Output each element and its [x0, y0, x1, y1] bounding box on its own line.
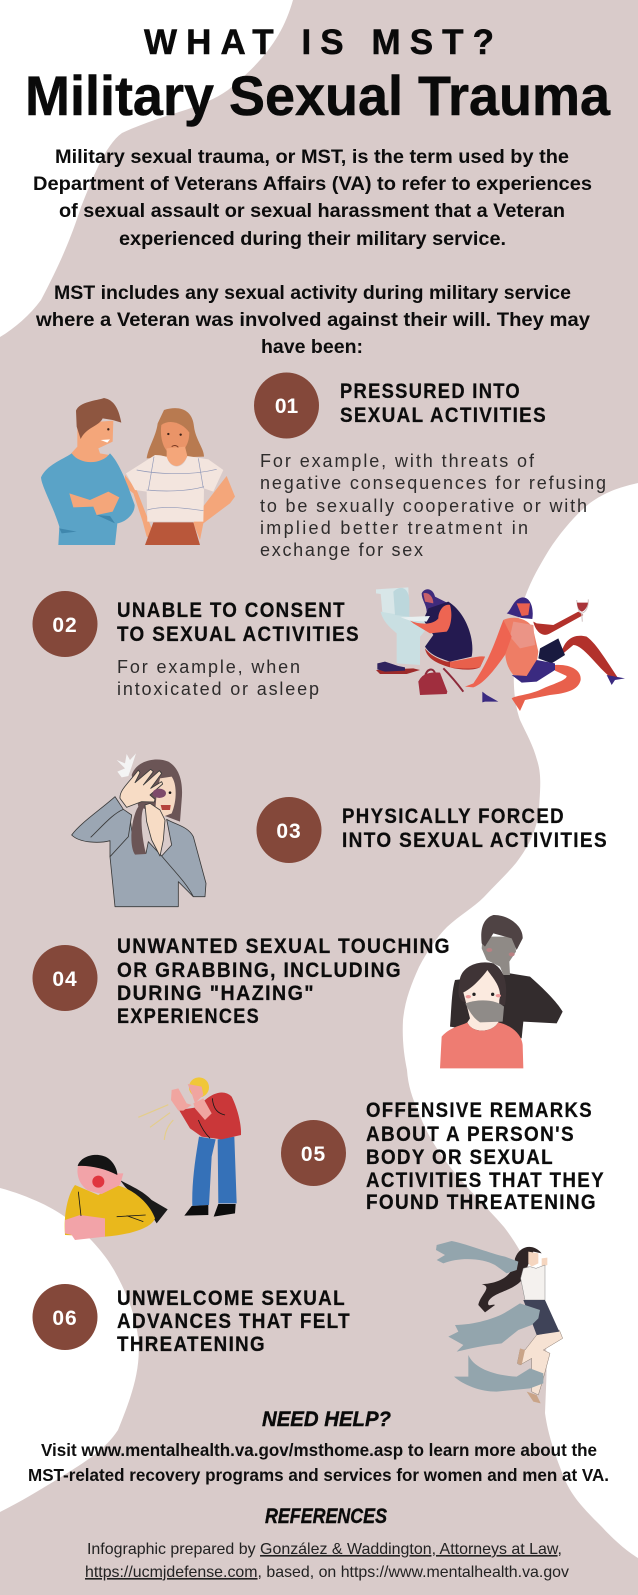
second paragraph: have been:: [261, 336, 363, 358]
text block: help: [28, 1440, 609, 1485]
description 01: negative consequences for refusing: [260, 473, 606, 493]
heading 03: INTO SEXUAL ACTIVITIES: [342, 829, 608, 852]
heading 01: PRESSURED INTO: [340, 380, 521, 403]
heading 06: [117, 1287, 351, 1356]
intro paragraph: of sexual assault or sexual harassment that a Veteran: [59, 200, 565, 222]
intro paragraph: [33, 146, 592, 250]
heading 06: UNWELCOME SEXUAL: [117, 1287, 346, 1310]
description 02: [117, 657, 319, 699]
badge 05: [281, 1120, 346, 1186]
heading 05: ABOUT A PERSON'S: [366, 1123, 575, 1146]
heading: references: REFERENCES: [265, 1505, 387, 1528]
text block: references: https://ucmjdefense.com, based, on https://www.mentalhealth.va.gov: [85, 1564, 569, 1581]
second paragraph: [35, 282, 590, 358]
heading 02: TO SEXUAL ACTIVITIES: [117, 623, 360, 646]
panel: item 02: [32, 591, 360, 699]
heading 04: UNWANTED SEXUAL TOUCHING: [117, 935, 451, 958]
heading 04: OR GRABBING, INCLUDING: [117, 959, 402, 982]
heading 05: OFFENSIVE REMARKS: [366, 1099, 593, 1122]
heading 04: [117, 935, 451, 1028]
heading 06: ADVANCES THAT FELT: [117, 1310, 351, 1333]
heading 05: BODY OR SEXUAL: [366, 1146, 554, 1169]
description 01: to be sexually cooperative or with: [260, 496, 587, 516]
text block: references: Infographic prepared by González & Waddington, Attorneys at Law,: [87, 1541, 562, 1558]
panel: item 06: [32, 1284, 351, 1356]
badge 04: [32, 945, 98, 1011]
description 02: intoxicated or asleep: [117, 679, 319, 699]
badge 04: 04: [52, 968, 78, 991]
heading 06: THREATENING: [117, 1333, 266, 1356]
heading 05: [366, 1099, 605, 1214]
icon: man shouting at woman: [65, 1077, 241, 1240]
panel: item 04: [32, 935, 451, 1028]
text block: references: [85, 1541, 569, 1581]
description 02: For example, when: [117, 657, 300, 677]
heading 03: PHYSICALLY FORCED: [342, 805, 565, 828]
badge 05: 05: [301, 1143, 326, 1166]
icon: man covering woman's mouth: [440, 915, 563, 1068]
description 01: [260, 451, 606, 560]
panel: item 05: [281, 1099, 605, 1214]
heading 02: UNABLE TO CONSENT: [117, 599, 346, 622]
icon: hands grabbing woman: [436, 1241, 563, 1403]
heading 03: [342, 805, 608, 852]
heading 05: ACTIVITIES THAT THEY: [366, 1169, 605, 1192]
text block: help: MST-related recovery programs and services for women and men at VA.: [28, 1465, 609, 1485]
intro paragraph: experienced during their military service.: [119, 228, 506, 250]
heading 01: SEXUAL ACTIVITIES: [340, 404, 547, 427]
panel: item 03: [256, 797, 608, 863]
heading 02: [117, 599, 360, 646]
icon: arguing couple: [41, 398, 235, 545]
heading 04: DURING "HAZING": [117, 982, 315, 1005]
description 01: exchange for sex: [260, 540, 423, 560]
description 01: implied better treatment in: [260, 518, 528, 538]
icon: woman shielding bruised face: [72, 753, 206, 907]
badge 06: 06: [52, 1307, 78, 1330]
badge 03: 03: [276, 820, 302, 843]
text block: help: Visit www.mentalhealth.va.gov/msthome.asp to learn more about the: [41, 1440, 597, 1460]
icon: intoxicated women: [376, 587, 625, 711]
badge 02: 02: [52, 614, 78, 637]
panel: item 01: [254, 372, 606, 560]
second paragraph: where a Veteran was involved against their will. They may: [35, 309, 590, 331]
title: military sexual trauma: Military Sexual Trauma: [25, 64, 611, 127]
badge 01: [254, 372, 319, 438]
heading 05: FOUND THREATENING: [366, 1191, 597, 1214]
intro paragraph: Military sexual trauma, or MST, is the term used by the: [55, 146, 569, 168]
badge 02: [32, 591, 98, 657]
description 01: For example, with threats of: [260, 451, 535, 471]
heading: need help: NEED HELP?: [262, 1408, 391, 1431]
heading 01: [340, 380, 547, 427]
badge 06: [32, 1284, 98, 1350]
badge 01: 01: [275, 395, 298, 418]
second paragraph: MST includes any sexual activity during military service: [54, 282, 571, 304]
title: what is mst: WHAT IS MST?: [144, 23, 494, 62]
heading 04: EXPERIENCES: [117, 1005, 260, 1028]
badge 03: [256, 797, 322, 863]
intro paragraph: Department of Veterans Affairs (VA) to refer to experiences: [33, 173, 592, 195]
